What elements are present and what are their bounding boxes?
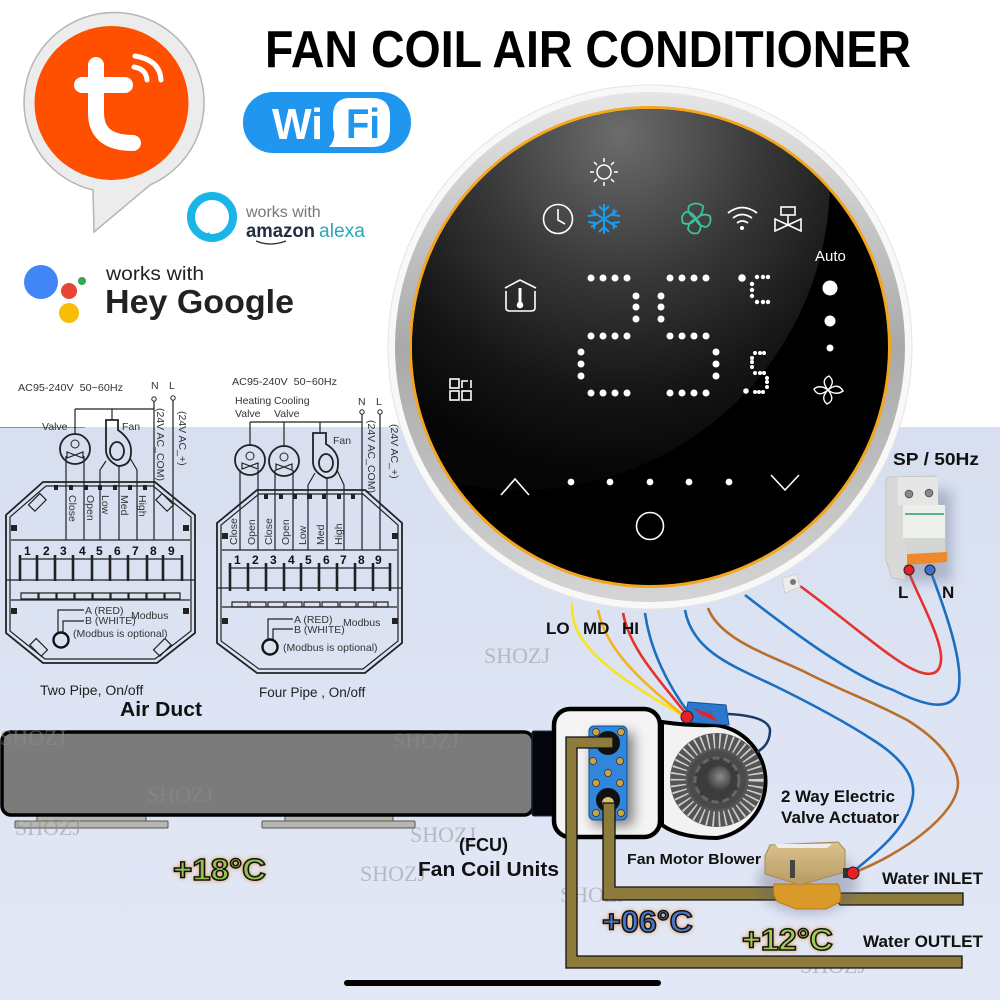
breaker shadow: [900, 490, 952, 582]
wire labels: Close: [228, 518, 240, 545]
valve names: Valve: [235, 408, 261, 420]
icon: green fan: [682, 204, 710, 234]
terminal numbers: [24, 544, 175, 558]
labels: fan speeds: LO: [546, 619, 570, 638]
touch controls: [501, 475, 799, 540]
wire labels: Open: [84, 495, 96, 521]
modbus block: Modbus: [131, 610, 168, 622]
capacitor: [684, 702, 770, 752]
black glass face: [412, 109, 888, 585]
icon: tuya smart bubble: [24, 12, 204, 232]
wire labels: Open: [280, 519, 292, 545]
device outline: [6, 482, 195, 663]
terminal numbers: 9: [168, 544, 175, 558]
wire labels: (24V AC_COM): [365, 420, 377, 493]
terminal numbers: 5: [96, 544, 103, 558]
temperature: chilled +06: +06°C: [602, 904, 693, 939]
wire labels: Low: [99, 495, 111, 515]
wire labels: (24V AC_+): [388, 424, 400, 479]
modbus block: [54, 605, 168, 648]
modbus block: Modbus: [343, 617, 380, 629]
label: fan coil units: Fan Coil Units: [418, 858, 559, 881]
fan coil unit: [554, 702, 963, 968]
water pipes: [566, 737, 963, 968]
fan blower wheel: [670, 733, 764, 827]
blue manifold plate: [589, 726, 627, 820]
terminal numbers: 8: [150, 544, 157, 558]
temperature: air +18: +18°C: [173, 852, 266, 887]
terminal numbers: 1: [24, 544, 31, 558]
icon: snowflake: [588, 204, 620, 234]
icon: wifi badge: Wi: [272, 100, 323, 149]
outer bezel: [388, 85, 912, 609]
supply label: AC95-240V 50~60Hz: [18, 382, 123, 394]
icon: white fan: [814, 376, 843, 404]
wire labels: Med: [118, 495, 130, 516]
fan speed dots: [822, 280, 838, 352]
device outline: [217, 490, 402, 673]
label: fcu: (FCU): [459, 835, 508, 855]
cable connector: [782, 574, 800, 593]
line and neutral terminals: N: [151, 380, 159, 392]
watermarks: SHOZJ: [15, 815, 81, 840]
caption: Two Pipe, On/off: [40, 682, 143, 698]
modbus block: A (RED): [294, 614, 333, 626]
valve names: Valve: [274, 408, 300, 420]
valve and fan symbols: [42, 400, 173, 540]
air duct: [2, 699, 553, 828]
watermarks: SHOZJ: [484, 643, 550, 668]
badge: works with amazon alexa: works with: [245, 204, 321, 221]
terminal numbers: 3: [270, 553, 277, 567]
labels: fan speeds: HI: [622, 619, 639, 638]
title: FAN COIL AIR CONDITIONER: [265, 21, 911, 79]
label: water inlet: Water INLET: [882, 870, 983, 888]
coil housing: [554, 709, 660, 837]
watermarks: SHOZJ: [0, 725, 66, 750]
blower housing: [662, 722, 766, 838]
wiring diagram: four pipe: [217, 376, 402, 700]
valve names: [235, 395, 310, 420]
valve names: Heating: [235, 395, 271, 407]
modbus block: (Modbus is optional): [73, 628, 168, 640]
watermarks: SHOZJ: [560, 882, 626, 907]
L and N terminals: L: [898, 583, 908, 602]
modbus block: B (WHITE): [85, 615, 136, 627]
badge: works with hey google: Hey Google: [105, 283, 294, 320]
line and neutral terminals: N: [358, 396, 366, 408]
icon: wifi badge: [243, 92, 411, 153]
terminal numbers: 4: [79, 544, 86, 558]
wire labels: Close: [263, 518, 275, 545]
caption: Four Pipe , On/off: [259, 685, 366, 700]
bottom black bar: [344, 980, 661, 986]
line and neutral terminals: [358, 396, 382, 414]
modbus block: (Modbus is optional): [283, 642, 378, 654]
valve and fan symbols: Valve: [42, 421, 68, 433]
modbus block: B (WHITE): [294, 624, 345, 636]
terminal numbers: 8: [358, 553, 365, 567]
badge: works with amazon alexa: [191, 196, 365, 244]
decimal five dots: [743, 351, 769, 394]
modbus block: A (RED): [85, 605, 124, 617]
wires to controller: [572, 575, 959, 872]
temperature: return +12: +12°C: [742, 922, 833, 957]
terminal numbers: 6: [114, 544, 121, 558]
wire labels: [66, 408, 188, 522]
modbus block: [262, 614, 380, 654]
circuit breaker: [886, 449, 979, 602]
icon: sun: [590, 158, 618, 186]
badge: works with hey google: works with: [105, 264, 204, 285]
icon: wifi signal: [728, 208, 757, 230]
manifold shadow: [592, 732, 634, 826]
wire labels: Low: [297, 525, 309, 545]
valve and fan symbols: Fan: [122, 421, 140, 433]
terminal numbers: 2: [43, 544, 50, 558]
watermarks: SHOZJ: [360, 861, 426, 886]
labels: fan speeds: MD: [583, 619, 609, 638]
text: auto: Auto: [815, 248, 846, 265]
icon: valve: [775, 207, 801, 231]
icon: clock: [544, 204, 572, 234]
breaker body: [886, 476, 947, 580]
icon: house thermometer: [505, 280, 536, 311]
badge: works with amazon alexa: alexa: [319, 221, 365, 242]
duct collar: [532, 731, 553, 816]
duct body: [2, 732, 533, 815]
label: valve actuator line two: Valve Actuator: [781, 808, 899, 827]
wiring diagram: two pipe: [6, 380, 195, 698]
wire labels: High: [136, 495, 148, 517]
air duct label: Air Duct: [120, 699, 202, 721]
circuit breaker: N: [942, 583, 954, 602]
supply label: AC95-240V 50~60Hz: [232, 376, 337, 388]
watermarks: SHOZJ: [393, 728, 459, 753]
valve and fan symbols: [235, 414, 380, 550]
degree celsius dots: [738, 274, 770, 304]
temperature dot display: [578, 274, 720, 396]
terminal numbers: 7: [132, 544, 139, 558]
terminal numbers: [234, 553, 382, 567]
2 way valve actuator: [765, 842, 859, 909]
watermarks: SHOZJ: [800, 953, 866, 978]
wire labels: (24V AC_COM): [154, 408, 166, 481]
valve names: Cooling: [274, 395, 310, 407]
terminal numbers: 6: [323, 553, 330, 567]
wire labels: [228, 420, 400, 545]
badge: works with amazon alexa: amazon: [246, 221, 315, 242]
breaker rating: SP / 50Hz: [893, 449, 979, 469]
red terminal: fan: [681, 711, 693, 723]
terminal numbers: 1: [234, 553, 241, 567]
valve and fan symbols: Fan: [333, 435, 351, 447]
watermarks: SHOZJ: [410, 822, 476, 847]
wire labels: Open: [246, 519, 258, 545]
icon: menu grid: [450, 379, 471, 400]
label: fan motor blower: Fan Motor Blower: [627, 851, 761, 868]
watermarks: SHOZJ: [147, 782, 213, 807]
thermostat: [388, 84, 912, 610]
terminal numbers: 9: [375, 553, 382, 567]
icon: wifi badge: Fi: [346, 100, 380, 147]
valve shadow: [758, 850, 858, 914]
duct mounting feet: [15, 816, 415, 828]
wire labels: High: [333, 523, 345, 545]
badge: works with hey google: [24, 264, 294, 323]
terminal numbers: 5: [305, 553, 312, 567]
wire labels: Med: [315, 524, 327, 545]
watermarks: [0, 643, 866, 978]
terminal numbers: 7: [340, 553, 347, 567]
line and neutral terminals: [151, 380, 175, 401]
line and neutral terminals: L: [376, 396, 382, 408]
wire labels: Close: [66, 495, 78, 522]
terminal numbers: 4: [288, 553, 295, 567]
line and neutral terminals: L: [169, 380, 175, 392]
wire labels: (24V AC_+): [176, 411, 188, 466]
terminal numbers: 3: [60, 544, 67, 558]
terminal numbers: 2: [252, 553, 259, 567]
lower background panel: [0, 427, 1000, 1000]
label: valve actuator: 2 Way Electric: [781, 787, 895, 806]
label: water outlet: Water OUTLET: [863, 933, 983, 951]
